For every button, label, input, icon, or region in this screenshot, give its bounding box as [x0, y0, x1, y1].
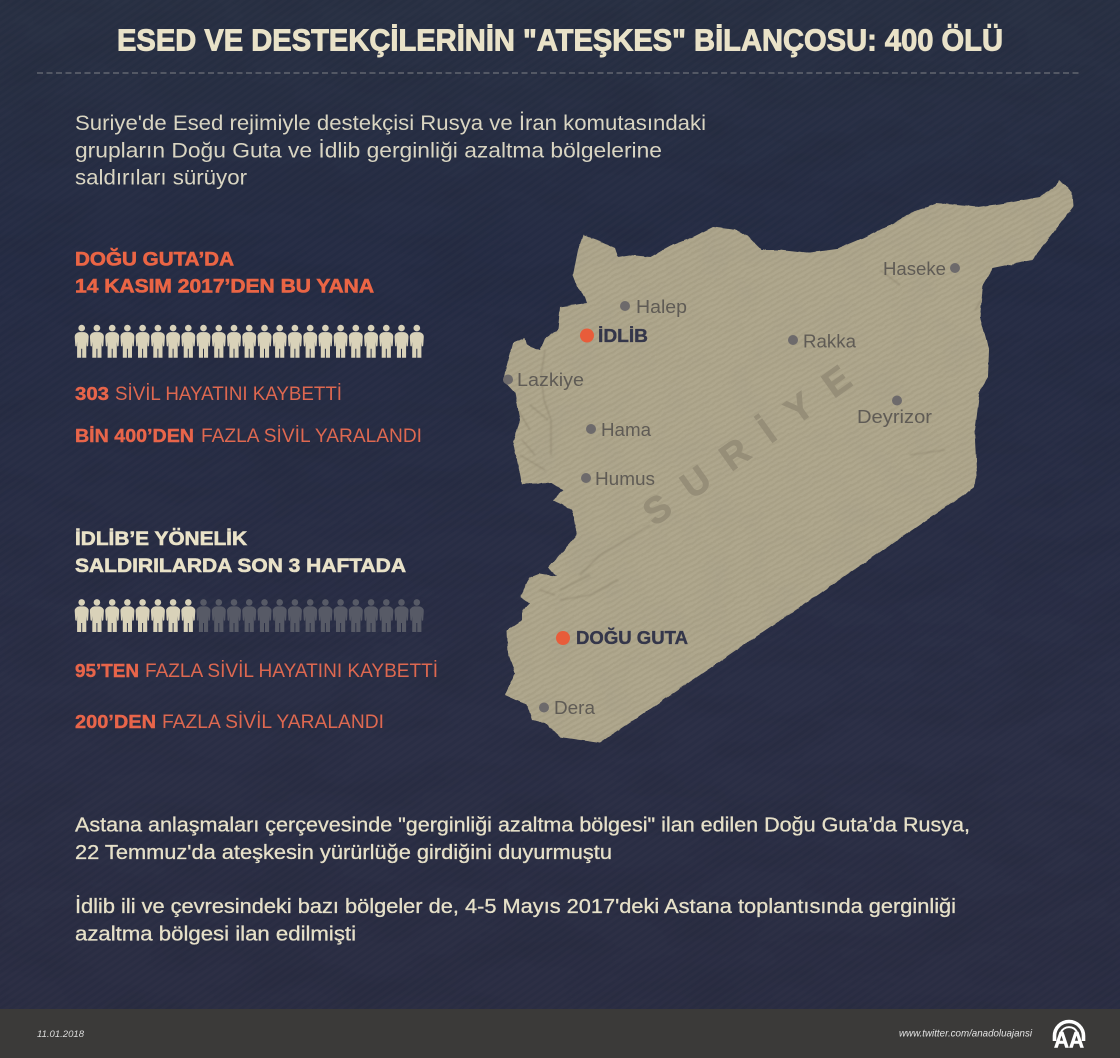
- text block: Astana agreements: 22 Temmuz'da ateşkesin yürürlüğe girdiğini duyurmuştu: [75, 842, 612, 864]
- city: Deyrizor: [857, 396, 932, 427]
- heading: İdlib: SALDIRILARDA SON 3 HAFTADA: [75, 555, 406, 577]
- panel: İdlib statistics: [75, 527, 438, 733]
- stat: 200 wounded: FAZLA SİVİL YARALANDI: [162, 712, 384, 733]
- stat: 1400 wounded: FAZLA SİVİL YARALANDI: [201, 426, 422, 447]
- stat: 200 wounded: [75, 711, 384, 733]
- city: Doğu Guta: DOĞU GUTA: [576, 627, 688, 648]
- city: Lazkiye: Lazkiye: [517, 369, 584, 390]
- stat: 1400 wounded: BİN 400’DEN: [75, 425, 194, 446]
- stat: 200 wounded: 200’DEN: [75, 711, 156, 732]
- stat: 1400 wounded: [75, 425, 422, 447]
- watermark label: SURİYE: SURİYE: [635, 358, 859, 533]
- stat: 303 deaths: 303: [75, 383, 109, 404]
- text block: Astana agreements: Astana anlaşmaları çerçevesinde "gerginliği azaltma bölgesi" ilan edilen Doğu Guta’da Rusya,: [75, 814, 970, 836]
- intro text: grupların Doğu Guta ve İdlib gerginliği azaltma bölgelerine: [75, 138, 662, 162]
- stat: 95 deaths: FAZLA SİVİL HAYATINI KAYBETTİ: [145, 661, 438, 682]
- city: Halep: Halep: [636, 296, 687, 317]
- city: Deyrizor: Deyrizor: [857, 406, 932, 427]
- social link: www.twitter.com/anadoluajansi: [899, 1028, 1033, 1040]
- intro text: saldırıları sürüyor: [75, 166, 247, 190]
- intro text: [75, 111, 706, 190]
- city: İdlib: İDLİB: [598, 326, 648, 346]
- stat: 95 deaths: 95’TEN: [75, 660, 139, 681]
- date: 11.01.2018: [37, 1029, 85, 1040]
- city: Rakka: Rakka: [803, 330, 857, 352]
- title: ESED VE DESTEKÇİLERİNİN "ATEŞKES" BİLANÇOSU: 400 ÖLÜ: [117, 22, 1003, 58]
- heading: İdlib: İDLİB’E YÖNELİK: [75, 527, 247, 550]
- stat: 303 deaths: SİVİL HAYATINI KAYBETTİ: [115, 384, 342, 405]
- text block: Astana agreements: [75, 814, 970, 946]
- pictogram: people row Doğu Guta: [75, 325, 424, 358]
- heading: Doğu Guta: [75, 248, 374, 298]
- text block: Astana agreements: İdlib ili ve çevresindeki bazı bölgeler de, 4-5 Mayıs 2017'deki Astana toplantısında gerginliği: [75, 895, 956, 918]
- heading: İdlib: [75, 527, 406, 577]
- city: Dera: Dera: [554, 697, 596, 718]
- pictogram: people row İdlib: [75, 599, 424, 632]
- footer bar: [0, 1009, 1120, 1058]
- text block: Astana agreements: azaltma bölgesi ilan edilmişti: [75, 924, 356, 946]
- city: Humus: Humus: [595, 468, 655, 489]
- city: Haseke: Haseke: [883, 258, 946, 279]
- intro text: Suriye'de Esed rejimiyle destekçisi Rusya ve İran komutasındaki: [75, 111, 706, 135]
- city: Hama: Hama: [601, 419, 652, 440]
- panel: Doğu Guta statistics: [75, 248, 424, 447]
- country shape: [503, 180, 1073, 743]
- city: İdlib: [580, 326, 648, 346]
- icon: Anadolu Agency logo: AA: [1054, 1028, 1084, 1052]
- map: Syria: [500, 175, 1080, 750]
- heading: Doğu Guta: DOĞU GUTA’DA: [75, 248, 234, 270]
- heading: Doğu Guta: 14 KASIM 2017’DEN BU YANA: [75, 276, 374, 298]
